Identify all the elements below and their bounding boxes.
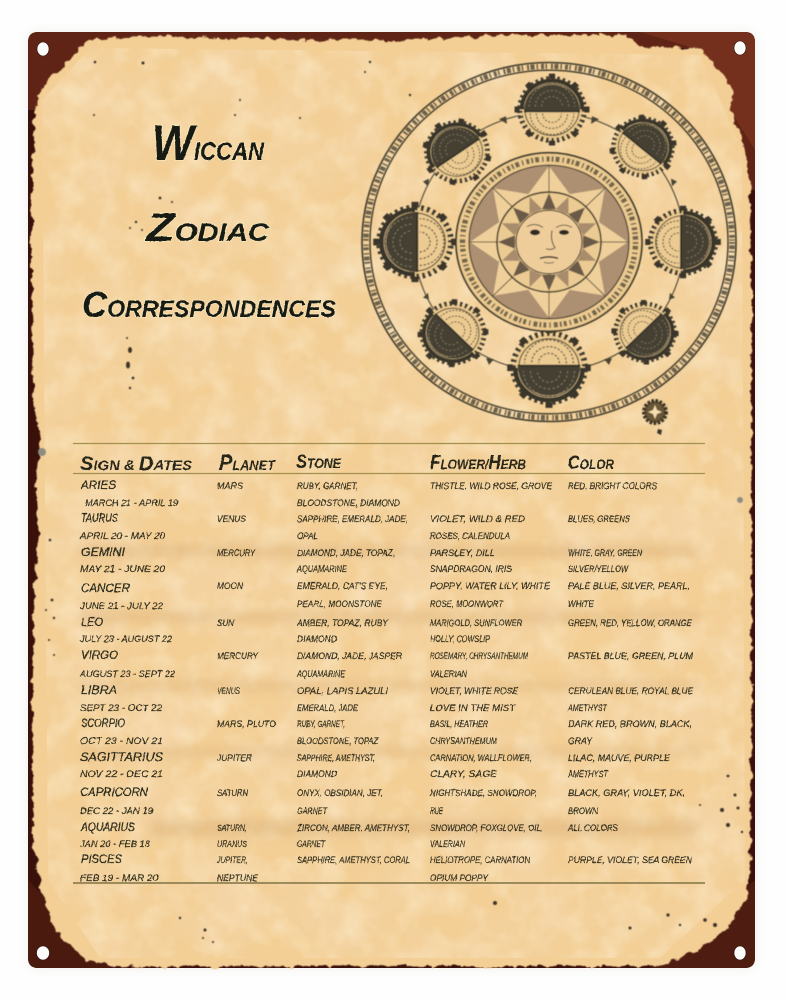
table header: FLOWER/HERB [430, 452, 526, 474]
row: Capricorn: BROWN [568, 806, 598, 817]
row: Pisces: PURPLE, VIOLET, SEA GREEN [568, 855, 692, 866]
row: Taurus: VENUS [217, 514, 247, 525]
row: Pisces: NEPTUNE [217, 873, 259, 884]
row: Virgo: AUGUST 23 - SEPT 22 [79, 669, 176, 680]
title [82, 115, 336, 325]
row: Aquarius: AQUARIUS [80, 820, 135, 834]
row: Sagittarius [80, 750, 671, 780]
row: Gemini: SILVER/YELLOW [568, 564, 629, 575]
row: Scorpio: GRAY [568, 736, 593, 747]
row: Virgo: PASTEL BLUE, GREEN, PLUM [568, 651, 693, 662]
row: Cancer: JUNE 21 - JULY 22 [79, 601, 164, 612]
row: Capricorn: BLACK, GRAY, VIOLET, DK. [568, 788, 685, 799]
outer inscribed ring [362, 62, 736, 422]
row: Gemini: MERCURY [217, 548, 256, 559]
row: Gemini: AQUAMARINE [296, 564, 348, 575]
row: Libra: EMERALD, JADE [297, 703, 359, 714]
row: Virgo: ROSEMARY, CHRYSANTHEMUM [430, 651, 528, 662]
row: Leo: MARIGOLD, SUNFLOWER [430, 618, 522, 629]
row: Sagittarius: AMETHYST [567, 769, 609, 780]
medallion: bottom [507, 328, 591, 408]
row: Gemini: SNAPDRAGON, IRIS [430, 564, 513, 575]
row: Sagittarius: DIAMOND [297, 769, 337, 780]
row: Gemini: PARSLEY, DILL [430, 548, 495, 559]
row: Cancer: POPPY, WATER LILY, WHITE [430, 581, 551, 592]
row: Libra: VIOLET, WHITE ROSE [430, 686, 519, 697]
row: Scorpio: SCORPIO [81, 716, 125, 730]
row: Libra: SEPT 23 - OCT 22 [80, 703, 163, 714]
row: Pisces: OPIUM POPPY [430, 873, 489, 884]
row: Taurus: APRIL 20 - MAY 20 [79, 531, 166, 542]
sun rays [497, 192, 601, 292]
row: Gemini: WHITE, GRAY, GREEN [568, 548, 642, 559]
row: Aries: MARCH 21 - APRIL 19 [85, 498, 179, 509]
small star emblem [644, 401, 666, 435]
eight-pointed star [470, 166, 628, 318]
row: Virgo: VIRGO [81, 648, 118, 662]
row: Sagittarius: CARNATION, WALLFLOWER, [430, 753, 532, 764]
row: Libra: CERULEAN BLUE, ROYAL BLUE [568, 686, 694, 697]
table header: COLOR [568, 453, 615, 474]
row: Aquarius: VALERIAN [430, 839, 465, 850]
row: Taurus: ROSES, CALENDULA [430, 531, 510, 542]
row: Pisces: SAPPHIRE, AMETHYST, CORAL [297, 855, 410, 866]
row: Scorpio: CHRYSANTHEMUM [430, 736, 497, 747]
row: Virgo: AQUAMARINE [296, 669, 345, 680]
row: Scorpio [80, 716, 692, 747]
row: Cancer: WHITE [568, 599, 595, 610]
row: Taurus: SAPPHIRE, EMERALD, JADE, [297, 514, 408, 525]
medallion: top right [595, 101, 691, 193]
row: Taurus: OPAL [297, 531, 318, 542]
row: Capricorn: RUE [430, 806, 443, 817]
row: Aries: BLOODSTONE, DIAMOND [297, 498, 400, 509]
row: Aries [80, 478, 658, 509]
row: Leo: LEO [81, 615, 103, 629]
row: Aquarius [79, 820, 619, 850]
row: Cancer: PALE BLUE, SILVER, PEARL, [568, 581, 690, 592]
medallion: bottom left [402, 284, 504, 382]
table header: STONE [296, 452, 342, 473]
speckles and wear marks [38, 61, 743, 943]
row: Leo: JULY 23 - AUGUST 22 [79, 634, 173, 645]
table header [80, 450, 615, 475]
row: Sagittarius: SAPPHIRE, AMETHYST, [297, 753, 375, 764]
row: Scorpio: MARS, PLUTO [217, 719, 277, 730]
row: Leo: AMBER, TOPAZ, RUBY [296, 618, 389, 629]
row: Capricorn: NIGHTSHADE, SNOWDROP, [430, 788, 537, 799]
row: Scorpio: OCT 23 - NOV 21 [80, 736, 163, 747]
row: Aries: THISTLE, WILD ROSE, GROVE [430, 481, 553, 492]
row: Cancer: EMERALD, CAT'S EYE, [297, 581, 388, 592]
medallion: top left [408, 105, 506, 199]
row: Taurus: BLUES, GREENS [568, 514, 631, 525]
row: Libra: LOVE IN THE MIST [430, 703, 516, 714]
row: Sagittarius: SAGITTARIUS [80, 750, 163, 764]
row: Scorpio: BASIL, HEATHER [430, 719, 488, 730]
row: Sagittarius: NOV 22 - DEC 21 [80, 769, 163, 780]
row: Scorpio: RUBY, GARNET, [297, 719, 345, 730]
title line: Zodiac: ZODIAC [145, 206, 270, 250]
row: Libra [80, 683, 694, 714]
orbit ring [414, 112, 684, 372]
row: Pisces: HELIOTROPE, CARNATION [430, 855, 530, 866]
title line: Wiccan: WICCAN [152, 115, 265, 171]
row: Scorpio: BLOODSTONE, TOPAZ [297, 736, 379, 747]
row: Cancer: PEARL, MOONSTONE [297, 599, 383, 610]
row: Sagittarius: LILAC, MAUVE, PURPLE [568, 753, 671, 764]
astrological wheel with sun [362, 62, 736, 422]
row: Libra: OPAL, LAPIS LAZULI [297, 686, 388, 697]
row: Aries: ARIES [80, 478, 116, 492]
row: Capricorn: CAPRICORN [80, 785, 148, 799]
title line: Correspondences: CORRESPONDENCES [82, 284, 336, 325]
row: Aquarius: SATURN, [217, 823, 247, 834]
row: Aquarius: URANUS [217, 839, 247, 850]
medallion: bottom right [597, 286, 693, 379]
medallion: top [515, 74, 589, 145]
row: Taurus: VIOLET, WILD & RED [430, 514, 525, 525]
row: Virgo: DIAMOND, JADE, JASPER [297, 651, 402, 662]
medallion: left [373, 202, 457, 282]
row: Aries: MARS [217, 481, 244, 492]
row: Gemini: DIAMOND, JADE, TOPAZ, [297, 548, 395, 559]
row: Capricorn: GARNET [297, 806, 328, 817]
row: Gemini: MAY 21 - JUNE 20 [80, 564, 166, 575]
row: Aries: RUBY, GARNET, [297, 481, 358, 492]
sun face [516, 210, 582, 274]
row: Cancer: MOON [217, 581, 243, 592]
row: Aquarius: ZIRCON, AMBER, AMETHYST, [296, 823, 410, 834]
row: Sagittarius: JUPITER [216, 753, 252, 764]
correspondence table [79, 450, 694, 884]
row: Cancer: CANCER [81, 581, 130, 595]
row: Taurus [79, 511, 631, 542]
row: Capricorn: DEC 22 - JAN 19 [80, 806, 154, 817]
row: Sagittarius: CLARY, SAGE [430, 769, 498, 780]
table header: PLANET [219, 450, 276, 475]
row: Aries: RED, BRIGHT COLORS [568, 481, 658, 492]
row: Capricorn: SATURN [217, 788, 248, 799]
medallion: right [645, 206, 721, 278]
row: Leo: GREEN, RED, YELLOW, ORANGE [568, 618, 693, 629]
row: Leo: HOLLY, COWSLIP [430, 634, 490, 645]
row: Leo: SUN [217, 618, 234, 629]
central medallion [456, 153, 642, 331]
row: Pisces: PISCES [81, 852, 122, 866]
row: Cancer: ROSE, MOONWORT [430, 599, 504, 610]
table rules [73, 444, 705, 883]
row: Libra: AMETHYST [567, 703, 608, 714]
row: Pisces [80, 852, 692, 884]
row: Aquarius: SNOWDROP, FOXGLOVE, OIL, [430, 823, 543, 834]
row: Gemini: GEMINI [81, 545, 126, 559]
row: Scorpio: DARK RED, BROWN, BLACK, [568, 719, 692, 730]
row: Virgo [79, 648, 693, 680]
row: Libra: LIBRA [81, 683, 117, 697]
row: Cancer [79, 581, 690, 612]
row: Virgo: VALERIAN [430, 669, 467, 680]
row: Pisces: JUPITER, [216, 855, 248, 866]
row: Aquarius: JAN 20 - FEB 18 [79, 839, 151, 850]
table header: SIGN & DATES [80, 454, 193, 475]
row: Aquarius: GARNET [297, 839, 326, 850]
row: Pisces: FEB 19 - MAR 20 [80, 873, 159, 884]
row: Capricorn [80, 785, 685, 817]
row: Gemini [80, 545, 642, 575]
row: Capricorn: ONYX, OBSIDIAN, JET, [297, 788, 383, 799]
row: Taurus: TAURUS [81, 511, 118, 525]
row: Libra: VENUS [217, 686, 240, 697]
row: Virgo: MERCURY [217, 651, 259, 662]
row: Aquarius: ALL COLORS [567, 823, 619, 834]
row: Leo: DIAMOND [297, 634, 337, 645]
row: Leo [79, 615, 693, 645]
